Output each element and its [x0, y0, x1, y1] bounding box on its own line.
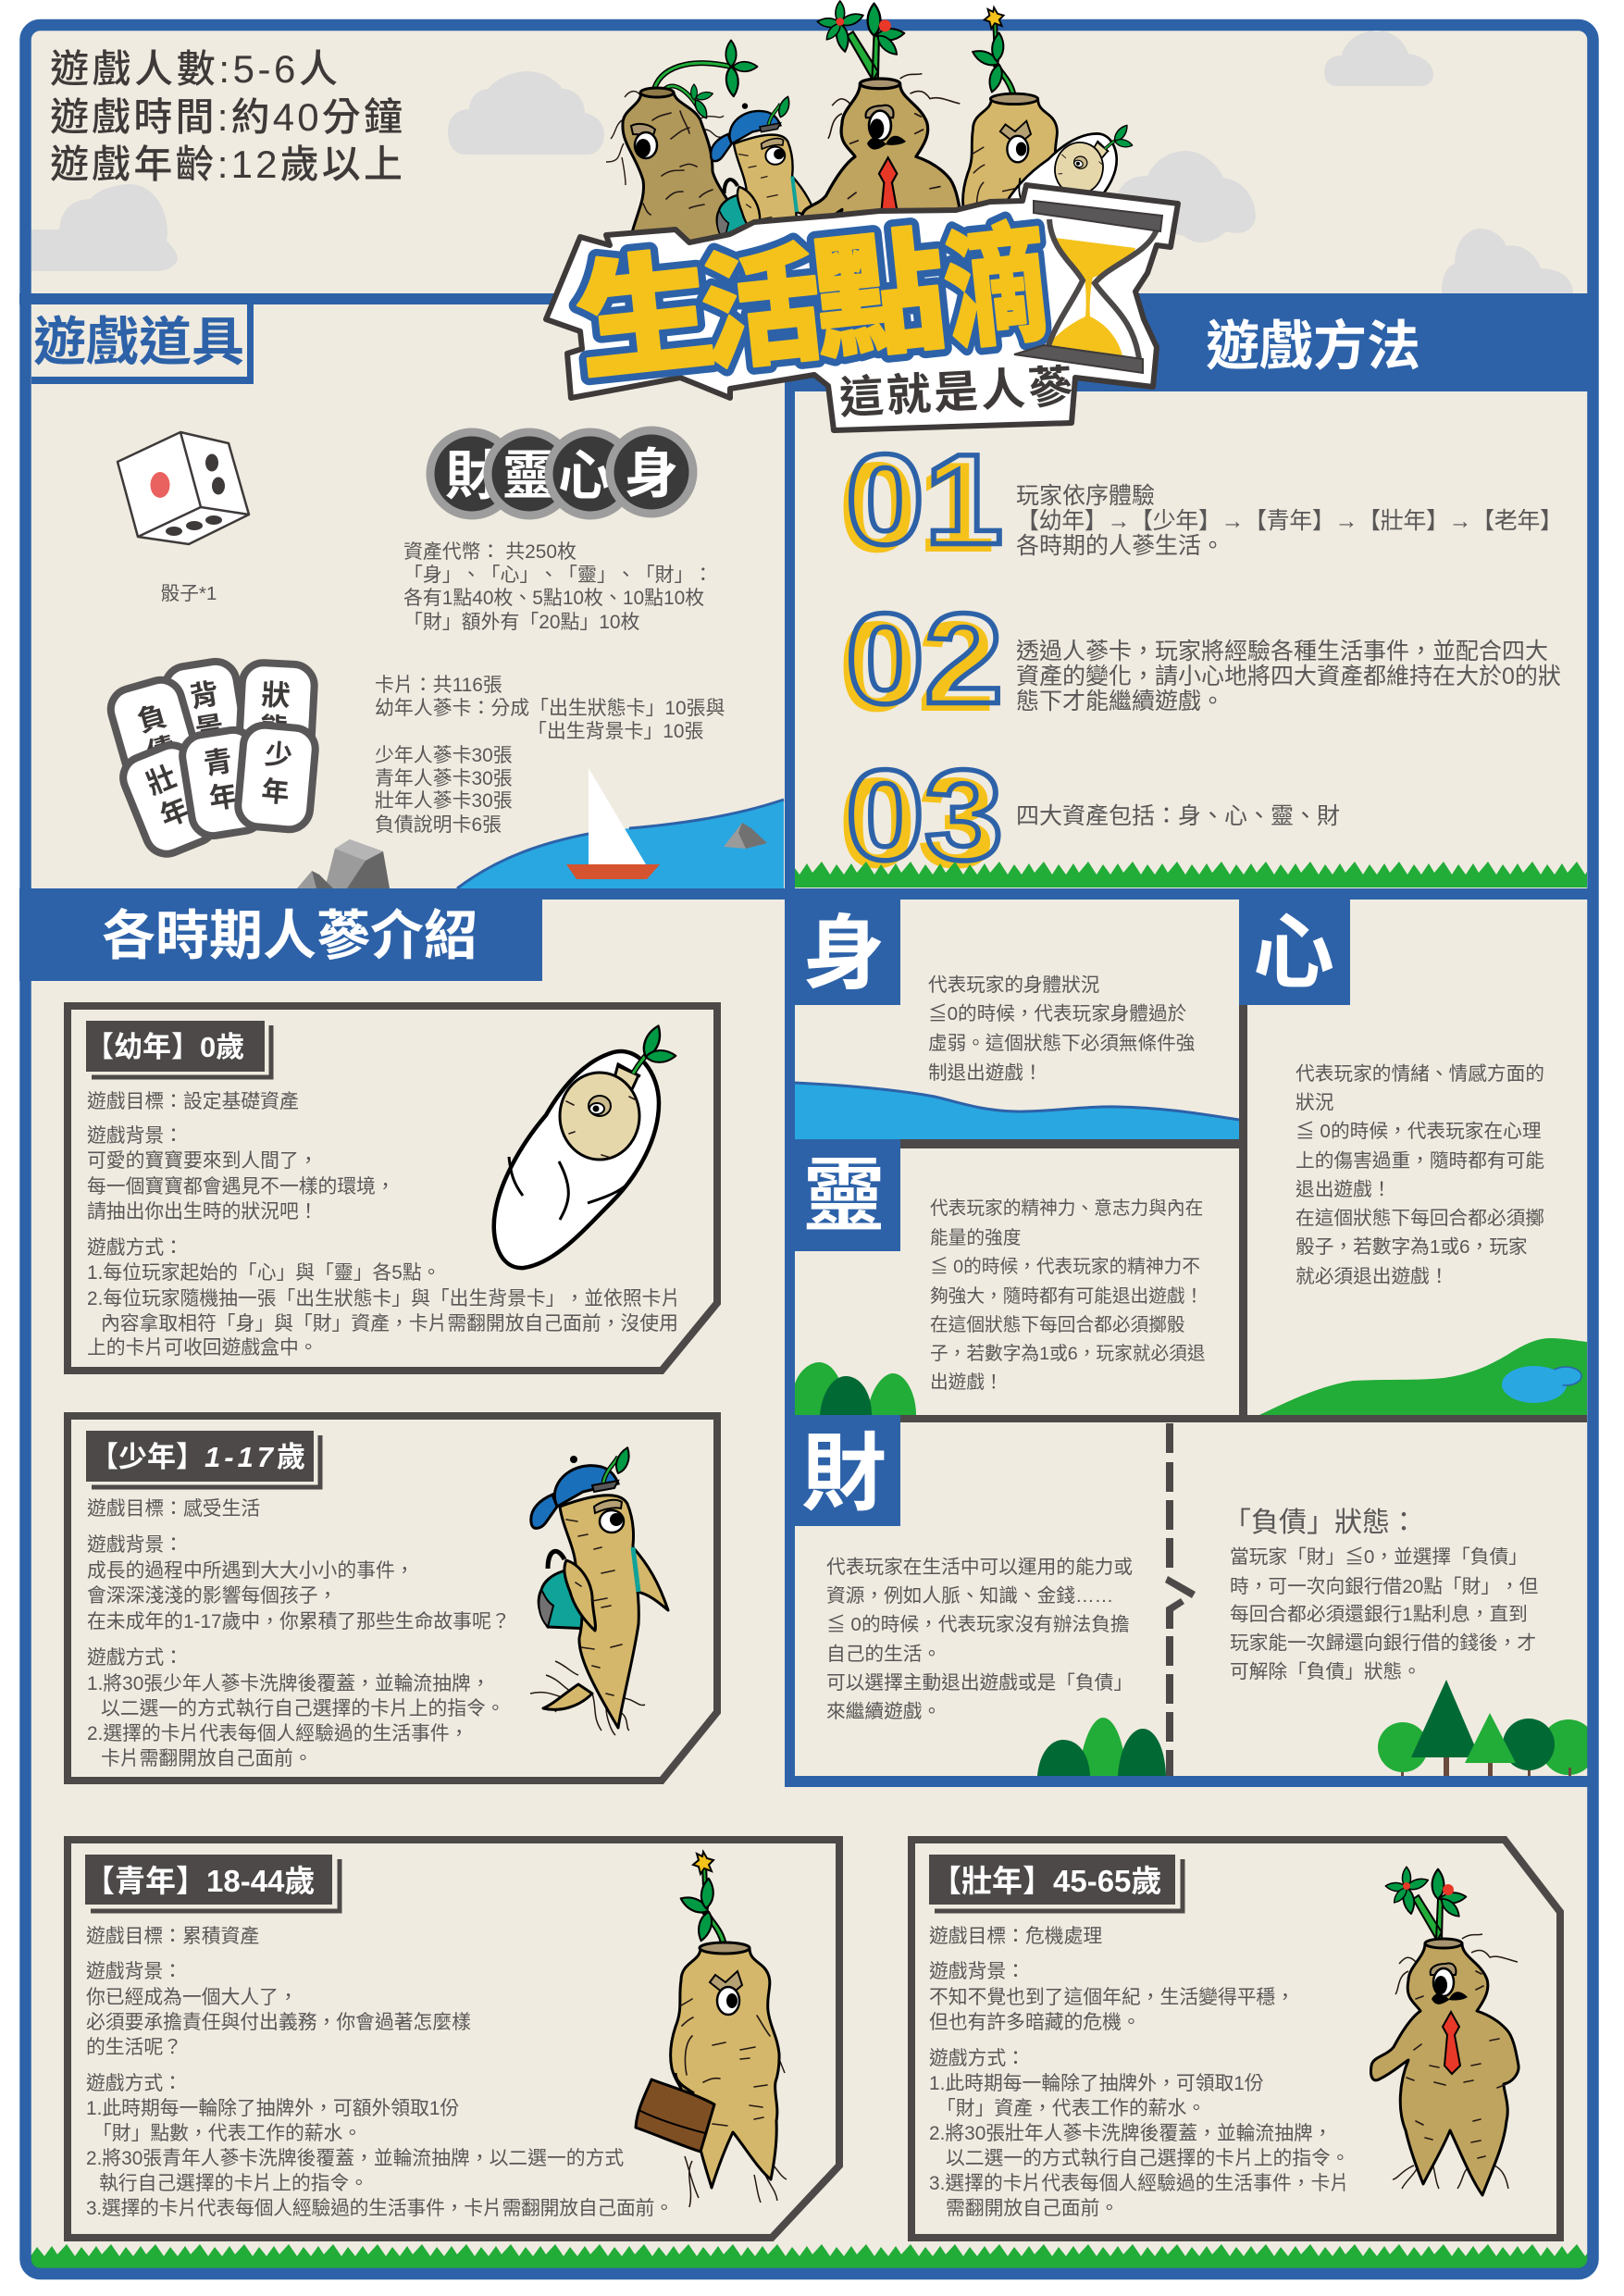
text: middle age: 但也有許多暗藏的危機。	[929, 2012, 1141, 2033]
text: youth: 在未成年的1-17歲中，你累積了那些生命故事呢？	[87, 1611, 511, 1632]
label: infancy	[85, 1021, 271, 1077]
logo title outline layer	[570, 211, 1057, 396]
step 01 text	[1016, 483, 1563, 559]
text: middle age: 以二選一的方式執行自己選擇的卡片上的指令。	[946, 2148, 1350, 2169]
text: youth: 以二選一的方式執行自己選擇的卡片上的指令。	[101, 1698, 505, 1719]
tab: body: 身	[803, 908, 885, 999]
label: middle age	[929, 1855, 1183, 1911]
game info: players, time, age: 遊戲人數:5-6人	[50, 47, 338, 91]
text: infancy: 遊戲方式：	[87, 1237, 183, 1259]
text: debt state: 當玩家「財」≦0，並選擇「負債」	[1230, 1546, 1528, 1568]
text: adulthood: 執行自己選擇的卡片上的指令。	[99, 2173, 368, 2194]
bottom grass strip	[31, 2244, 1588, 2268]
text: adulthood: 必須要承擔責任與付出義務，你會過著怎麼樣	[86, 2012, 471, 2033]
label: adulthood: 【青年】18-44歲	[84, 1864, 315, 1898]
tab: mind	[1239, 900, 1350, 1005]
step 02 text: 態下才能繼續遊戲。	[1016, 689, 1224, 714]
hill and pond	[1259, 1338, 1587, 1415]
text: adulthood	[86, 1926, 674, 2219]
tab: mind: 心	[1253, 907, 1334, 999]
text: wealth: 自己的生活。	[826, 1644, 941, 1665]
icon: card fan: 態	[259, 712, 290, 746]
heading: life stage introduction: 各時期人蔘介紹	[102, 906, 477, 966]
text: middle age: 3.選擇的卡片代表每個人經驗過的生活事件，卡片	[929, 2173, 1349, 2194]
heading: game method: 遊戲方法	[1206, 316, 1420, 377]
text: adulthood: 「財」點數，代表工作的薪水。	[93, 2123, 362, 2144]
text: wealth	[826, 1557, 1133, 1722]
step 01 text: 各時期的人蔘生活。	[1016, 533, 1224, 559]
panel: game method steps	[795, 428, 1587, 894]
label: youth	[86, 1431, 320, 1487]
text: infancy: 請抽出你出生時的狀況吧！	[87, 1201, 318, 1222]
text: middle age: 遊戲目標：危機處理	[929, 1926, 1102, 1947]
icon: dice	[118, 432, 249, 544]
logo title text: 活	[694, 233, 828, 387]
icon: card fan: 年	[155, 792, 194, 833]
text: adulthood: 2.將30張青年人蔘卡洗牌後覆蓋，並輪流抽牌，以二選一的方式	[86, 2148, 624, 2169]
text: youth: 成長的過程中所遇到大大小小的事件，	[87, 1560, 415, 1582]
logo title text: 生	[570, 238, 721, 396]
panel: mind section	[1239, 900, 1587, 1415]
text: spirit: ≦ 0的時候，代表玩家的精神力不	[930, 1257, 1200, 1277]
asset token text: 資產代幣： 共250枚	[403, 541, 576, 563]
step number 03: 03	[846, 743, 1003, 887]
character: baby ginseng	[494, 1024, 676, 1268]
label: infancy: 【幼年】0歲	[85, 1031, 244, 1063]
text: mind: 在這個狀態下每回合都必須擲	[1295, 1208, 1544, 1229]
logo title outline layer: 生	[570, 238, 721, 396]
panel: game tools	[31, 304, 784, 888]
text: body: 虛弱。這個狀態下必須無條件強	[928, 1033, 1195, 1054]
text: mind: 骰子，若數字為1或6，玩家	[1295, 1236, 1528, 1258]
text: debt state: 每回合都必須還銀行1點利息，直到	[1230, 1604, 1528, 1625]
heading: debt state: 「負債」狀態：	[1223, 1508, 1418, 1538]
text: wealth: 來繼續遊戲。	[826, 1701, 941, 1722]
icon: card fan: 壯	[143, 760, 180, 800]
text: debt state: 時，可一次向銀行借20點「財」，但	[1230, 1576, 1538, 1597]
text: adulthood: 你已經成為一個大人了，	[86, 1987, 298, 2008]
step 02 text: 資產的變化，請小心地將四大資產都維持在大於0的狀	[1016, 664, 1561, 689]
character: young adult ginseng with briefcase	[636, 1852, 787, 2207]
dividing bands	[19, 293, 1588, 1787]
asset token text: 「身」、「心」、「靈」、「財」：	[403, 565, 713, 586]
tab: body	[795, 900, 900, 1005]
text: spirit: 夠強大，隨時都有可能退出遊戲！	[930, 1286, 1203, 1307]
text: youth: 1.將30張少年人蔘卡洗牌後覆蓋，並輪流抽牌，	[87, 1673, 490, 1694]
text: infancy: 每一個寶寶都會遇見不一樣的環境，	[87, 1176, 395, 1198]
dashed divider with gap arrow	[1165, 1423, 1196, 1776]
text: spirit: 在這個狀態下每回合都必須擲骰	[930, 1315, 1185, 1335]
card list text: 少年人蔘卡30張	[375, 745, 513, 766]
icon: card fan: 年	[260, 776, 291, 809]
character: old ginseng	[606, 41, 758, 242]
text: infancy: 1.每位玩家起始的「心」與「靈」各5點。	[87, 1262, 440, 1284]
text: spirit: 代表玩家的精神力、意志力與內在	[930, 1198, 1203, 1219]
text: youth: 遊戲方式：	[87, 1647, 183, 1669]
text: middle age: 1.此時期每一輪除了抽牌外，可領取1份	[929, 2073, 1264, 2094]
water strip	[795, 1083, 1239, 1139]
panel: adulthood	[68, 1840, 839, 2238]
logo title outline layer: 點	[806, 217, 953, 378]
text: mind: 就必須退出遊戲！	[1295, 1266, 1449, 1287]
card list text: 青年人蔘卡30張	[375, 768, 513, 789]
card list text: 卡片：共116張	[375, 675, 502, 696]
icon: card fan: 負	[134, 699, 170, 738]
icon: asset tokens: 靈	[502, 446, 556, 506]
text: youth: 2.選擇的卡片代表每個人經驗過的生活事件，	[87, 1723, 468, 1744]
panel: infancy	[68, 1006, 717, 1371]
icon: card fan: 狀	[261, 678, 291, 713]
text: body: 代表玩家的身體狀況	[928, 974, 1099, 996]
logo title outline layer: 活	[694, 233, 828, 387]
step number 01: 01	[846, 428, 1003, 571]
text: mind: 上的傷害過重，隨時都有可能	[1295, 1150, 1544, 1172]
bushes	[1037, 1718, 1166, 1776]
text: youth: 遊戲目標：感受生活	[87, 1498, 260, 1520]
text: youth: 會深深淺淺的影響每個孩子，	[87, 1584, 337, 1607]
step 01 text: 玩家依序體驗	[1016, 483, 1155, 509]
logo title text: 點	[806, 217, 953, 378]
text: infancy: 遊戲背景：	[87, 1125, 183, 1147]
text: youth: 遊戲背景：	[87, 1534, 183, 1556]
bushes	[795, 1362, 916, 1415]
icon: card fan: 背	[188, 677, 221, 714]
card list text: 壯年人蔘卡30張	[375, 790, 513, 812]
text: middle age	[929, 1926, 1350, 2219]
text: spirit: 出遊戲！	[930, 1372, 1003, 1393]
text: middle age: 「財」資產，代表工作的薪水。	[936, 2098, 1206, 2119]
text: middle age: 需翻開放自己面前。	[946, 2198, 1119, 2219]
text: middle age: 遊戲背景：	[929, 1961, 1025, 1982]
text: debt state: 玩家能一次歸還向銀行借的錢後，才	[1230, 1632, 1536, 1654]
logo title outline layer: 滴	[937, 211, 1057, 366]
character: teen ginseng in header	[710, 95, 821, 327]
step number 02: 02	[838, 594, 996, 738]
icon: card fan: 少	[264, 739, 293, 772]
text: middle age: 遊戲方式：	[929, 2048, 1025, 2069]
game info: players, time, age: 遊戲時間:約40分鐘	[50, 95, 403, 139]
background clouds	[31, 31, 1573, 293]
logo backing shape	[546, 185, 1178, 430]
text: wealth: 資源，例如人脈、知識、金錢……	[826, 1585, 1113, 1607]
text: youth: 卡片需翻開放自己面前。	[101, 1748, 313, 1769]
logo title text: 滴	[937, 211, 1057, 366]
text: mind: ≦ 0的時候，代表玩家在心理	[1295, 1121, 1542, 1142]
icon: asset tokens: 心	[558, 446, 612, 506]
icon: hourglass	[1014, 201, 1162, 373]
text: body: ≦0的時候，代表玩家身體過於	[928, 1003, 1187, 1024]
text: adulthood: 1.此時期每一輪除了抽牌外，可額外領取1份	[86, 2098, 459, 2119]
panel: youth	[68, 1416, 717, 1781]
text: mind: 代表玩家的情緒、情感方面的	[1295, 1063, 1544, 1085]
icon: asset tokens	[430, 430, 693, 515]
text: infancy: 遊戲目標：設定基礎資產	[87, 1091, 299, 1112]
panel: middle age	[911, 1840, 1560, 2238]
card list text: 「出生背景卡」10張	[527, 721, 703, 742]
panel: wealth section	[795, 1415, 1596, 1776]
asset token text	[403, 541, 713, 633]
character: middle-aged ginseng in header	[801, 1, 961, 355]
tab: spirit: 靈	[803, 1150, 885, 1242]
dice label: 骰子*1	[161, 583, 217, 604]
text: adulthood: 的生活呢？	[86, 2037, 182, 2058]
text: adulthood: 遊戲背景：	[86, 1961, 182, 1982]
heading: game tools: 遊戲道具	[33, 313, 244, 372]
game info: players, time, age: 遊戲年齡:12歲以上	[50, 143, 403, 186]
step 02 text: 透過人蔘卡，玩家將經驗各種生活事件，並配合四大	[1016, 639, 1548, 664]
text: infancy	[87, 1091, 680, 1359]
label: youth: 【少年】1-17歲	[90, 1441, 305, 1473]
text: wealth: 代表玩家在生活中可以運用的能力或	[826, 1557, 1133, 1578]
grass strip	[795, 862, 1587, 887]
text: middle age: 不知不覺也到了這個年紀，生活變得平穩，	[929, 1987, 1295, 2008]
text: infancy: 可愛的寶寶要來到人間了，	[87, 1150, 318, 1172]
text: debt state	[1230, 1546, 1538, 1682]
character: young adult ginseng in header	[930, 7, 1073, 345]
card list text: 負債說明卡6張	[375, 814, 502, 836]
trees	[1378, 1680, 1596, 1776]
asset token text: 各有1點40枚、5點10枚、10點10枚	[403, 588, 704, 609]
tab: spirit	[795, 1139, 900, 1251]
text: debt state: 可解除「負債」狀態。	[1230, 1661, 1421, 1682]
card list text	[375, 675, 725, 836]
step number 01: 01	[838, 435, 996, 578]
text: mind: 狀況	[1295, 1092, 1333, 1113]
scenery: sea, boat and rocks	[297, 768, 784, 888]
game info: players, time, age	[50, 47, 403, 186]
text: wealth: ≦ 0的時候，代表玩家沒有辦法負擔	[826, 1614, 1130, 1635]
step 02 text	[1016, 639, 1561, 714]
label: middle age: 【壯年】45-65歲	[931, 1864, 1161, 1898]
subtitle: 這就是人蔘	[838, 363, 1076, 424]
section dividers	[900, 1005, 1587, 1422]
logo title text	[570, 211, 1057, 396]
icon: card fan: 債	[143, 731, 180, 770]
icon: card fan	[105, 659, 317, 861]
text: spirit: 能量的強度	[930, 1228, 1021, 1248]
step number 03: 03	[838, 751, 996, 894]
text: infancy: 2.每位玩家隨機抽一張「出生狀態卡」與「出生背景卡」，並依照卡片	[87, 1288, 680, 1309]
text: adulthood: 3.選擇的卡片代表每個人經驗過的生活事件，卡片需翻開放自己面前。	[86, 2198, 674, 2219]
left header band	[19, 293, 612, 304]
text: infancy: 內容拿取相符「身」與「財」資產，卡片需翻開放自己面前，沒使用	[101, 1312, 678, 1334]
text: body	[928, 974, 1195, 1084]
text: middle age: 2.將30張壯年人蔘卡洗牌後覆蓋，並輪流抽牌，	[929, 2123, 1333, 2144]
text: mind	[1295, 1063, 1544, 1287]
tab: wealth	[795, 1415, 900, 1526]
title logo	[546, 185, 1178, 430]
icon: card fan: 年	[206, 779, 240, 815]
text: mind: 退出遊戲！	[1295, 1179, 1391, 1200]
text: infancy: 上的卡片可收回遊戲盒中。	[87, 1337, 318, 1359]
step 01 text: 【幼年】→【少年】→【青年】→【壯年】→【老年】	[1016, 508, 1563, 534]
icon: card fan: 景	[192, 710, 226, 747]
card list text: 幼年人蔘卡：分成「出生狀態卡」10張與	[375, 698, 725, 719]
panel: body section	[795, 900, 1239, 1139]
icon: asset tokens: 財	[445, 446, 499, 506]
character: teen ginseng with backpack	[530, 1446, 668, 1735]
tab: wealth: 財	[801, 1427, 886, 1521]
icon: asset tokens: 身	[625, 444, 678, 504]
step 03 text: 四大資產包括：身、心、靈、財	[1016, 803, 1340, 829]
character: middle-aged ginseng with tie	[1370, 1867, 1519, 2195]
text: youth	[87, 1498, 511, 1769]
panel: spirit section	[795, 1139, 1206, 1415]
step number 02: 02	[846, 587, 1003, 730]
text: adulthood: 遊戲目標：累積資產	[86, 1926, 259, 1947]
icon: card fan: 青	[201, 744, 235, 781]
character: baby ginseng in header	[994, 98, 1137, 268]
label: adulthood	[84, 1855, 340, 1911]
asset token text: 「財」額外有「20點」10枚	[403, 612, 639, 633]
text: wealth: 可以選擇主動退出遊戲或是「負債」	[826, 1672, 1133, 1694]
text: spirit	[930, 1198, 1206, 1393]
text: body: 制退出遊戲！	[928, 1062, 1043, 1084]
text: spirit: 子，若數字為1或6，玩家就必須退	[930, 1344, 1206, 1364]
text: adulthood: 遊戲方式：	[86, 2073, 182, 2094]
water edge	[795, 1083, 1239, 1120]
